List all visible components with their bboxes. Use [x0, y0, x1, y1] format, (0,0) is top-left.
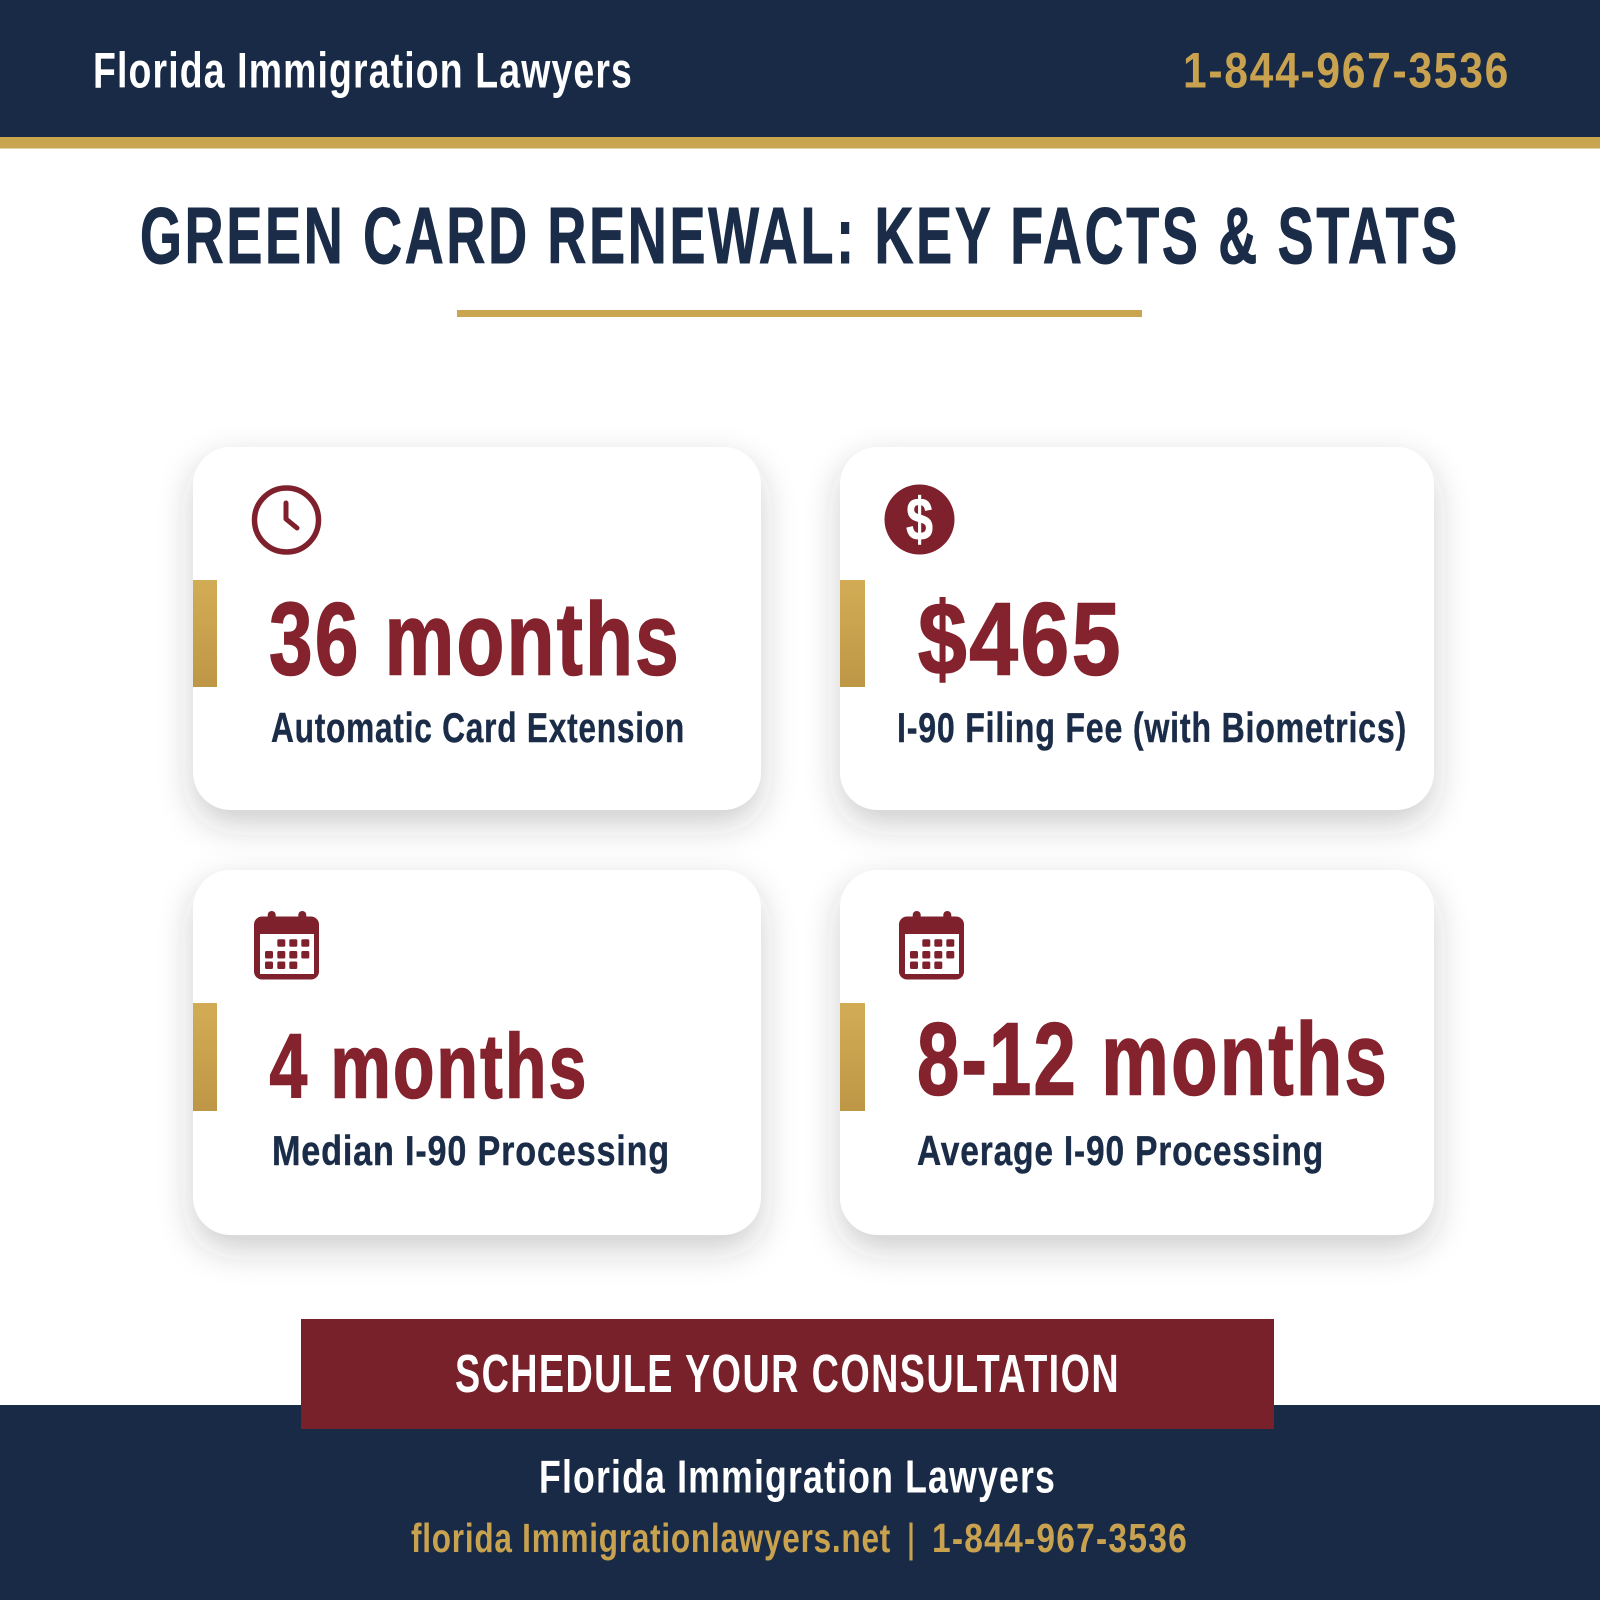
label: average processing: Average I-90 Processing [917, 1127, 1324, 1174]
icon: clock [254, 488, 318, 552]
icon: calendar [254, 911, 319, 980]
header phone number: 1-844-967-3536 [1183, 42, 1510, 98]
footer firm name: Florida Immigration Lawyers [539, 1450, 1056, 1502]
stat: 4 months: 4 months [270, 1016, 588, 1118]
footer contact line: florida Immigrationlawyers.net [411, 1515, 891, 1561]
accent bar [193, 580, 217, 687]
accent bar [193, 1003, 217, 1111]
stat: $465: $465 [918, 582, 1123, 696]
label: filing fee: I-90 Filing Fee (with Biometrics) [897, 704, 1407, 751]
call to action banner: SCHEDULE YOUR CONSULTATION [455, 1344, 1120, 1404]
icon: calendar [899, 911, 964, 980]
stat: 36 months: 36 months [269, 582, 681, 696]
accent bar [840, 580, 865, 687]
icon: dollar coin: $ [906, 486, 933, 553]
footer contact line: 1-844-967-3536 [932, 1515, 1188, 1561]
footer band [0, 1405, 1600, 1600]
card: median processing [193, 870, 761, 1235]
label: median processing: Median I-90 Processing [272, 1127, 670, 1174]
top header band [0, 0, 1600, 148]
firm name: Florida Immigration Lawyers [93, 42, 633, 98]
icon: dollar coin [884, 484, 954, 554]
label: automatic card extension: Automatic Card Extension [271, 704, 685, 751]
stat: 8-12 months: 8-12 months [917, 1002, 1389, 1116]
card: automatic card extension [193, 447, 761, 810]
call to action banner [301, 1319, 1274, 1429]
title underline [457, 310, 1142, 317]
accent bar [840, 1003, 865, 1111]
card: filing fee [840, 447, 1434, 810]
footer contact line: | [906, 1515, 916, 1561]
card: average processing [840, 870, 1434, 1235]
